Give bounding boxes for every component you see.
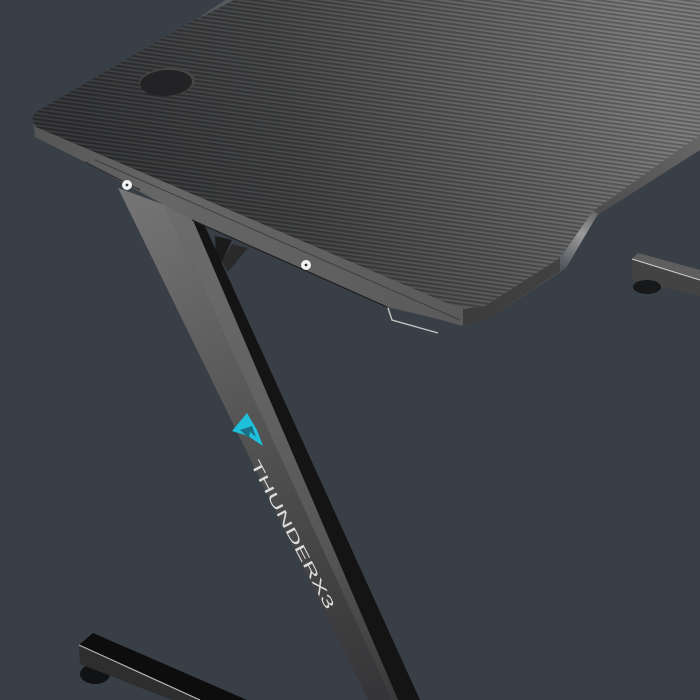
screw right [301,260,311,270]
desk edge and rail [33,118,700,326]
screw left [122,180,132,190]
logo mark [232,413,263,446]
rear desk notch [197,0,234,19]
right foot [632,253,700,296]
foot pad [633,280,661,294]
Z-shaped leg [118,188,420,700]
brand name: THUNDERX3 [247,457,338,612]
desktop surface [32,0,700,308]
left foot [79,633,247,700]
mounting bracket [388,308,438,333]
back brace [215,236,248,272]
cable grommet [138,66,196,98]
